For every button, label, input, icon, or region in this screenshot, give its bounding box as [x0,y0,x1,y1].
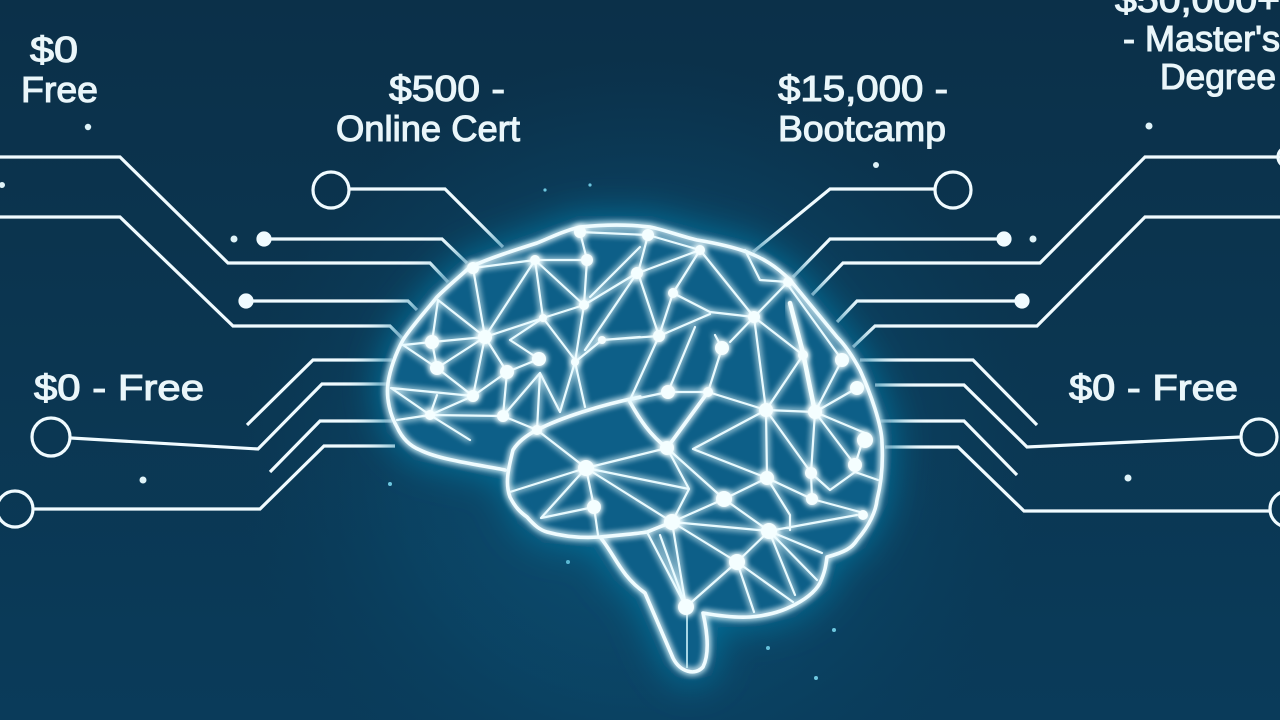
label: $15,000 Bootcamp [778,68,948,149]
label: $0 Free, top left: $0 [30,29,78,70]
label: $0 Free, top left: Free [21,69,98,110]
neural network brain [387,225,882,673]
thin brain stem line [686,610,688,668]
brain halo [240,60,1040,720]
brain interior fill [388,227,882,673]
brain network edges [391,232,878,612]
right circuit lines [753,147,1280,527]
label: $0 - Free, left: $0 - Free [34,367,204,408]
left circuit lines [0,157,503,527]
brain outline [387,225,882,672]
brain outer glow [388,227,882,673]
thick bright strand [790,303,815,412]
label: $50,000+ Master's Degree: - Master's [1123,18,1280,59]
label: $50,000+ Master's Degree: Degree [1160,56,1276,97]
label: $500 Online Cert [336,68,520,149]
decorative particle dots [0,122,1152,680]
label: $15,000 Bootcamp: Bootcamp [778,108,946,149]
label: $500 Online Cert: $500 - [389,68,505,109]
label: $0 - Free, right: $0 - Free [1069,367,1238,408]
brain nodes [425,226,873,615]
label: $15,000 Bootcamp: $15,000 - [778,68,948,109]
label: $500 Online Cert: Online Cert [336,108,520,149]
label: $0 Free, top left [21,29,98,110]
label: $50,000+ Master's Degree [1115,0,1280,97]
